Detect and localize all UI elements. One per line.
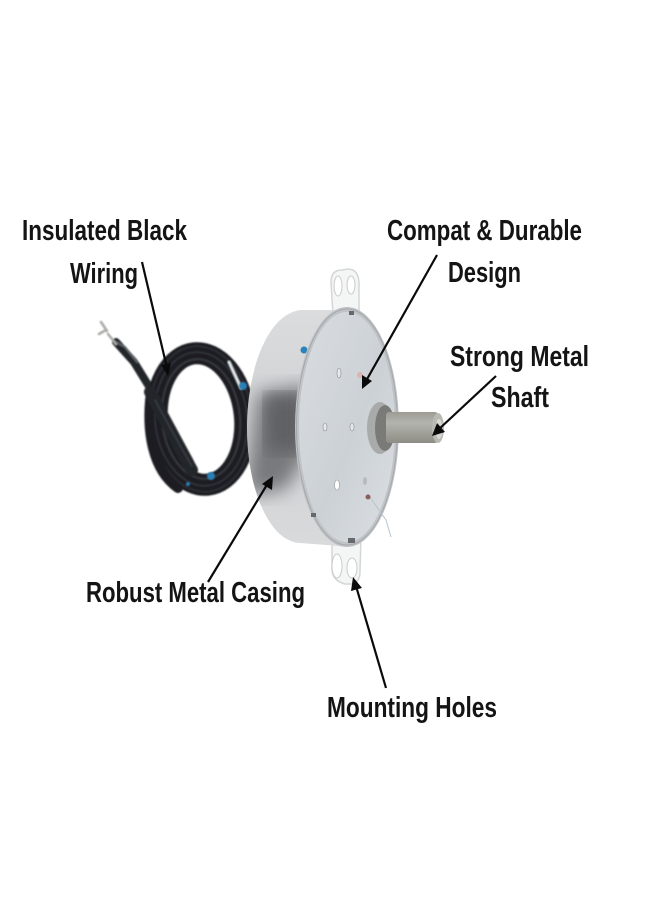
strong metal shaft xyxy=(367,402,444,454)
arrow: casing xyxy=(208,476,273,582)
label: Strong Metal Shaft: Strong Metal xyxy=(450,341,589,373)
cable coil: insulated black wiring xyxy=(99,322,259,497)
label: Insulated Black Wiring xyxy=(22,215,188,290)
bottom mounting tab xyxy=(332,537,361,584)
top mounting tab xyxy=(331,269,359,315)
motor xyxy=(240,269,444,584)
infographic canvas xyxy=(24,219,588,723)
label: Robust Metal Casing: Robust Metal Casing xyxy=(86,577,305,609)
top and bottom notches xyxy=(349,311,354,315)
label: Insulated Black Wiring: Wiring xyxy=(70,258,138,290)
arrow: shaft xyxy=(432,376,496,436)
face holes xyxy=(337,368,341,378)
label: Strong Metal Shaft xyxy=(450,341,589,414)
metal casing body xyxy=(247,310,340,546)
label: Strong Metal Shaft: Shaft xyxy=(491,382,549,414)
arrow: mounting holes xyxy=(351,577,386,688)
casing blue dot xyxy=(300,346,308,354)
arrow: wiring xyxy=(142,262,171,376)
motor face plate xyxy=(295,307,399,547)
label: Mounting Holes: Mounting Holes xyxy=(327,692,497,724)
label: Compact & Durable Design: Compat & Durable xyxy=(387,215,582,247)
label: Compact & Durable Design: Design xyxy=(448,257,521,289)
label: Compact & Durable Design xyxy=(387,215,582,289)
wire blue markers xyxy=(186,382,247,486)
arrow: design xyxy=(362,255,437,389)
label: Insulated Black Wiring: Insulated Black xyxy=(22,215,188,247)
